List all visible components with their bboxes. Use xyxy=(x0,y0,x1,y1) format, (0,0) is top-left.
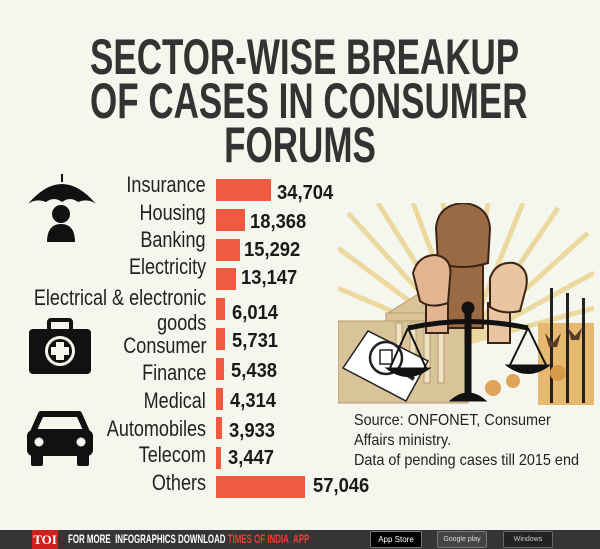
footer banner: Google play xyxy=(443,536,481,543)
row: Others xyxy=(152,470,369,498)
source note: Source: ONFONET, Consumer xyxy=(354,412,551,429)
title: FORUMS xyxy=(224,117,376,173)
bar chart: 34,704 xyxy=(277,182,333,204)
row: Telecom xyxy=(139,442,274,469)
bar chart: Consumer xyxy=(123,333,206,358)
bar chart: Finance xyxy=(142,360,206,385)
row: Electricity xyxy=(129,254,297,290)
bar chart: 5,731 xyxy=(232,330,278,352)
title xyxy=(90,29,528,173)
right panel with bars and flowers xyxy=(485,288,594,405)
bar chart: Banking xyxy=(141,227,206,252)
footer banner xyxy=(0,530,600,549)
building xyxy=(338,291,468,403)
bar chart: Electricity xyxy=(129,254,206,279)
bar chart: 4,314 xyxy=(230,390,276,412)
bar chart: 3,447 xyxy=(228,447,274,469)
app store badges: App Store xyxy=(378,535,414,544)
bar chart: 15,292 xyxy=(244,239,300,261)
footer text: FOR MORE INFOGRAPHICS DOWNLOAD TIMES OF INDIA APP xyxy=(68,532,309,546)
title: OF CASES IN CONSUMER xyxy=(90,73,528,129)
fists xyxy=(413,203,527,343)
bar chart: Electrical & electronic xyxy=(34,285,206,310)
bar chart: Others xyxy=(152,470,206,495)
bar chart: Telecom xyxy=(139,442,206,467)
app store badges xyxy=(370,531,422,548)
bar chart: Automobiles xyxy=(107,416,206,441)
source note: Data of pending cases till 2015 end xyxy=(354,452,579,469)
row: Insurance xyxy=(127,172,334,204)
bar chart: goods xyxy=(157,310,206,335)
bar chart: 3,933 xyxy=(229,420,275,442)
bar chart: Insurance xyxy=(127,172,206,197)
row: Electrical & electronic goods xyxy=(34,285,278,335)
row: Finance xyxy=(142,358,277,385)
row: Automobiles xyxy=(106,416,275,442)
source note xyxy=(354,412,579,469)
icon: car xyxy=(27,411,93,466)
bar chart: 18,368 xyxy=(250,211,306,233)
TOI logo: TOI xyxy=(33,532,57,547)
row: Banking xyxy=(141,227,300,261)
title: SECTOR-WISE BREAKUP xyxy=(90,29,519,85)
document with magnifier xyxy=(343,331,428,401)
bar chart: 6,014 xyxy=(232,302,278,324)
row: Consumer xyxy=(123,328,278,358)
bar chart: Housing xyxy=(140,200,206,225)
row: Housing xyxy=(140,200,306,233)
source note: Affairs ministry. xyxy=(354,432,451,449)
bar chart: Medical xyxy=(144,388,206,413)
icon: umbrella over person xyxy=(28,174,96,242)
bar chart: 5,438 xyxy=(231,360,277,382)
row: Medical xyxy=(144,388,276,413)
scales xyxy=(386,302,550,401)
footer banner: Windows xyxy=(514,536,542,543)
icon: medical kit xyxy=(29,318,91,374)
bar chart: 57,046 xyxy=(313,475,369,497)
illustration: fists and scales of justice xyxy=(338,203,594,405)
bar chart: 13,147 xyxy=(241,267,297,289)
